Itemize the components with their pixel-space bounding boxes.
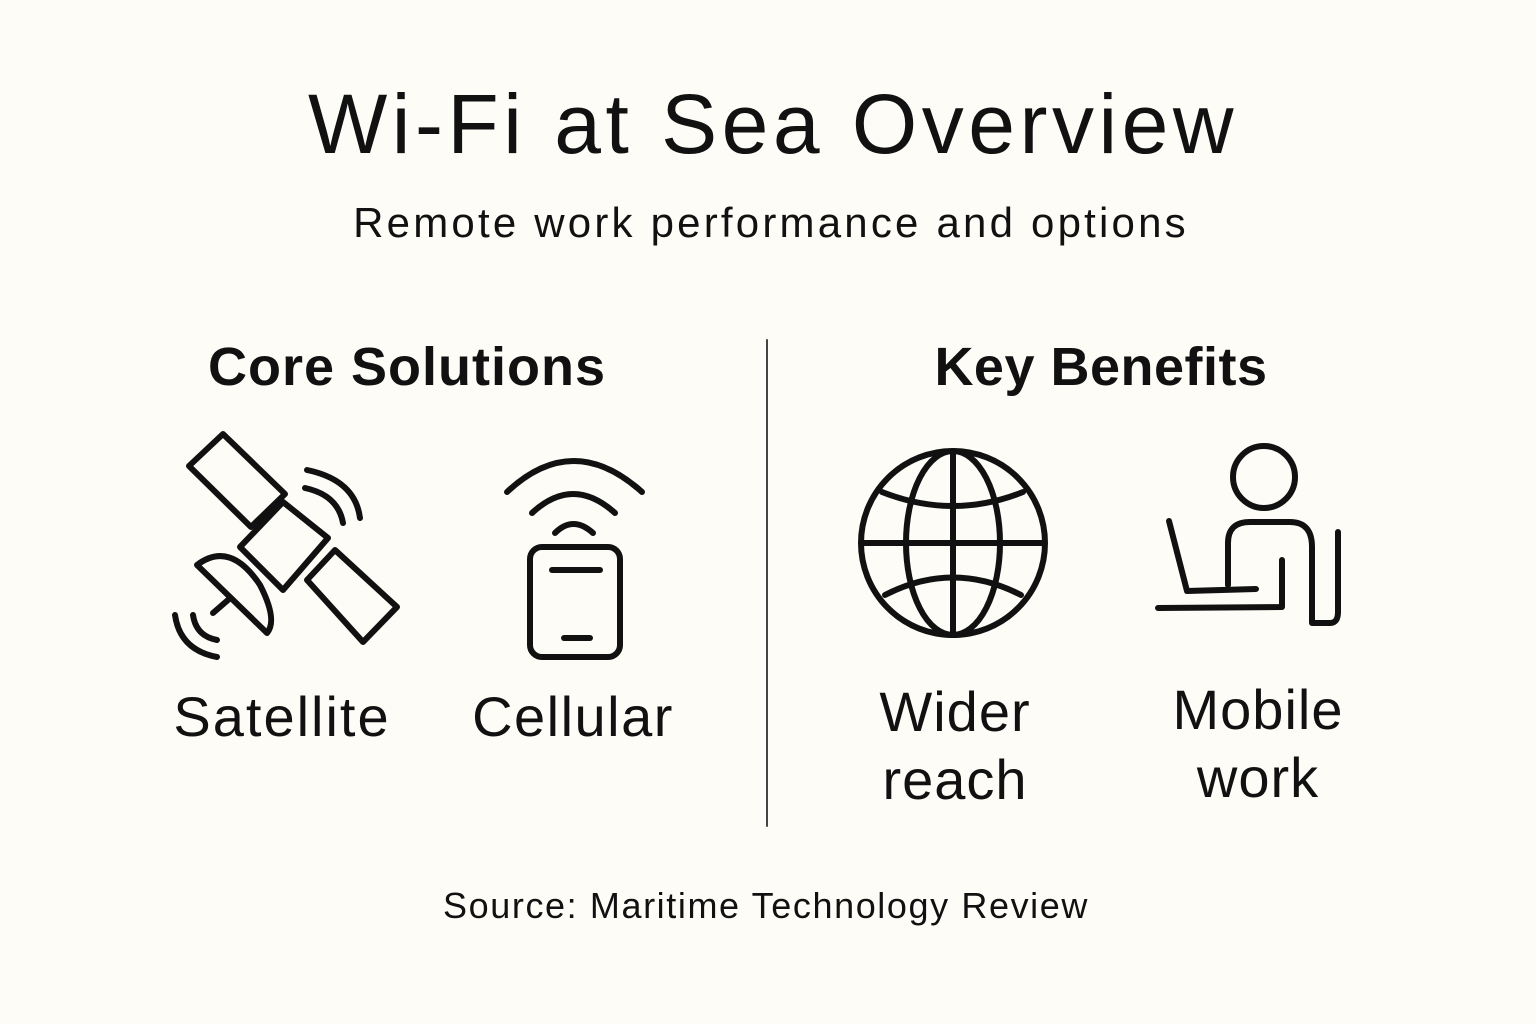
icon: globe	[861, 451, 1045, 635]
label: wider reach	[879, 680, 1031, 811]
heading: core solutions: Core Solutions	[208, 337, 606, 397]
label: mobile work: work	[1197, 746, 1319, 809]
heading: key benefits: Key Benefits	[934, 337, 1268, 397]
label: wider reach: reach	[882, 748, 1028, 811]
divider	[766, 340, 768, 826]
icon: satellite	[175, 434, 397, 657]
icon: mobile work person	[1158, 446, 1338, 623]
icon: cellular	[507, 461, 642, 657]
subtitle: Remote work performance and options	[353, 199, 1189, 246]
source: Source: Maritime Technology Review	[443, 885, 1089, 926]
label: cellular: Cellular	[472, 685, 674, 748]
title: Wi-Fi at Sea Overview	[308, 77, 1238, 171]
label: satellite: Satellite	[173, 685, 391, 748]
label: wider reach: Wider	[879, 680, 1031, 743]
label: mobile work	[1173, 678, 1343, 809]
label: mobile work: Mobile	[1173, 678, 1343, 741]
